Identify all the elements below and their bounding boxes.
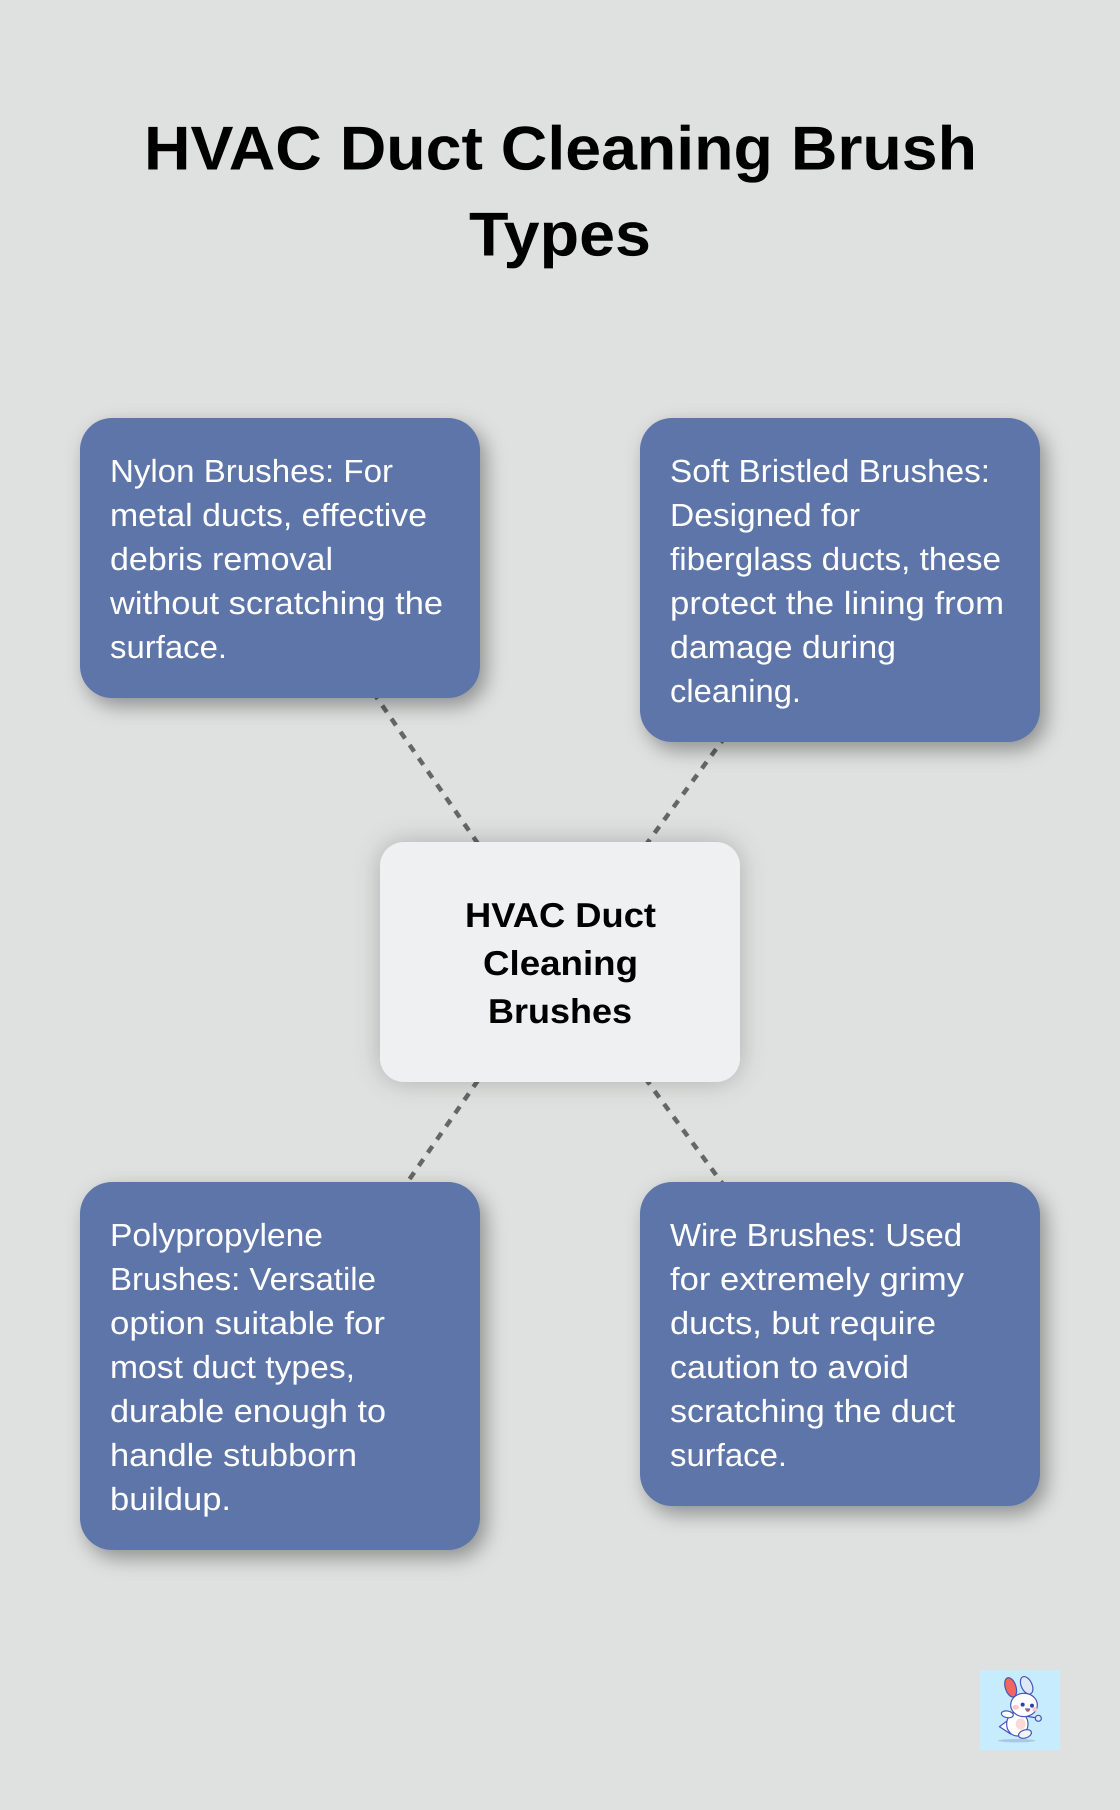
title: HVAC Duct Cleaning Brush (144, 114, 977, 184)
panel: nylon brushes: without scratching the (109, 585, 443, 621)
panel: wire brushes: ducts, but require (670, 1305, 936, 1341)
panel: polypropylene brushes: Brushes: Versatile (110, 1261, 376, 1297)
panel: polypropylene brushes: option suitable for (110, 1305, 385, 1341)
panel: polypropylene brushes: handle stubborn (110, 1437, 357, 1473)
panel: wire brushes: for extremely grimy (670, 1261, 964, 1297)
panel: wire brushes: scratching the duct (670, 1393, 955, 1429)
panel: nylon brushes (80, 418, 480, 698)
connector: center to polypropylene brushes (280, 962, 560, 1366)
icon: running bunny logo (980, 1670, 1060, 1750)
panel: nylon brushes: surface. (110, 629, 227, 665)
title (144, 114, 977, 270)
panel: polypropylene brushes: durable enough to (110, 1393, 386, 1429)
connector: center to nylon brushes (280, 558, 560, 962)
panel: soft bristled brushes: Designed for (670, 497, 860, 533)
title: Types (469, 200, 651, 270)
panel: wire brushes: Wire Brushes: Used (670, 1217, 962, 1253)
connector: center to wire brushes (560, 962, 840, 1344)
panel: soft bristled brushes: protect the lining from (670, 585, 1004, 621)
panel: soft bristled brushes: cleaning. (670, 673, 801, 709)
panel: soft bristled brushes: fiberglass ducts, these (670, 541, 1001, 577)
panel: center topic: HVAC Duct (465, 897, 657, 935)
panel: wire brushes (640, 1182, 1040, 1506)
panel: center topic: Brushes (488, 993, 632, 1031)
panel: soft bristled brushes (640, 418, 1040, 742)
panel: soft bristled brushes: Soft Bristled Brushes: (670, 453, 990, 489)
panel: polypropylene brushes: Polypropylene (110, 1217, 323, 1253)
panel: nylon brushes: metal ducts, effective (110, 497, 427, 533)
panel: polypropylene brushes: buildup. (110, 1481, 231, 1517)
connector: center to soft bristled brushes (560, 580, 840, 962)
panel: center topic: Cleaning (483, 945, 638, 983)
panel: soft bristled brushes: damage during (670, 629, 896, 665)
panel: nylon brushes: Nylon Brushes: For (110, 453, 393, 489)
panel: wire brushes: caution to avoid (670, 1349, 909, 1385)
panel: center topic (380, 842, 740, 1082)
panel: polypropylene brushes: most duct types, (110, 1349, 355, 1385)
panel: polypropylene brushes (80, 1182, 480, 1550)
panel: wire brushes: surface. (670, 1437, 787, 1473)
panel: nylon brushes: debris removal (110, 541, 333, 577)
